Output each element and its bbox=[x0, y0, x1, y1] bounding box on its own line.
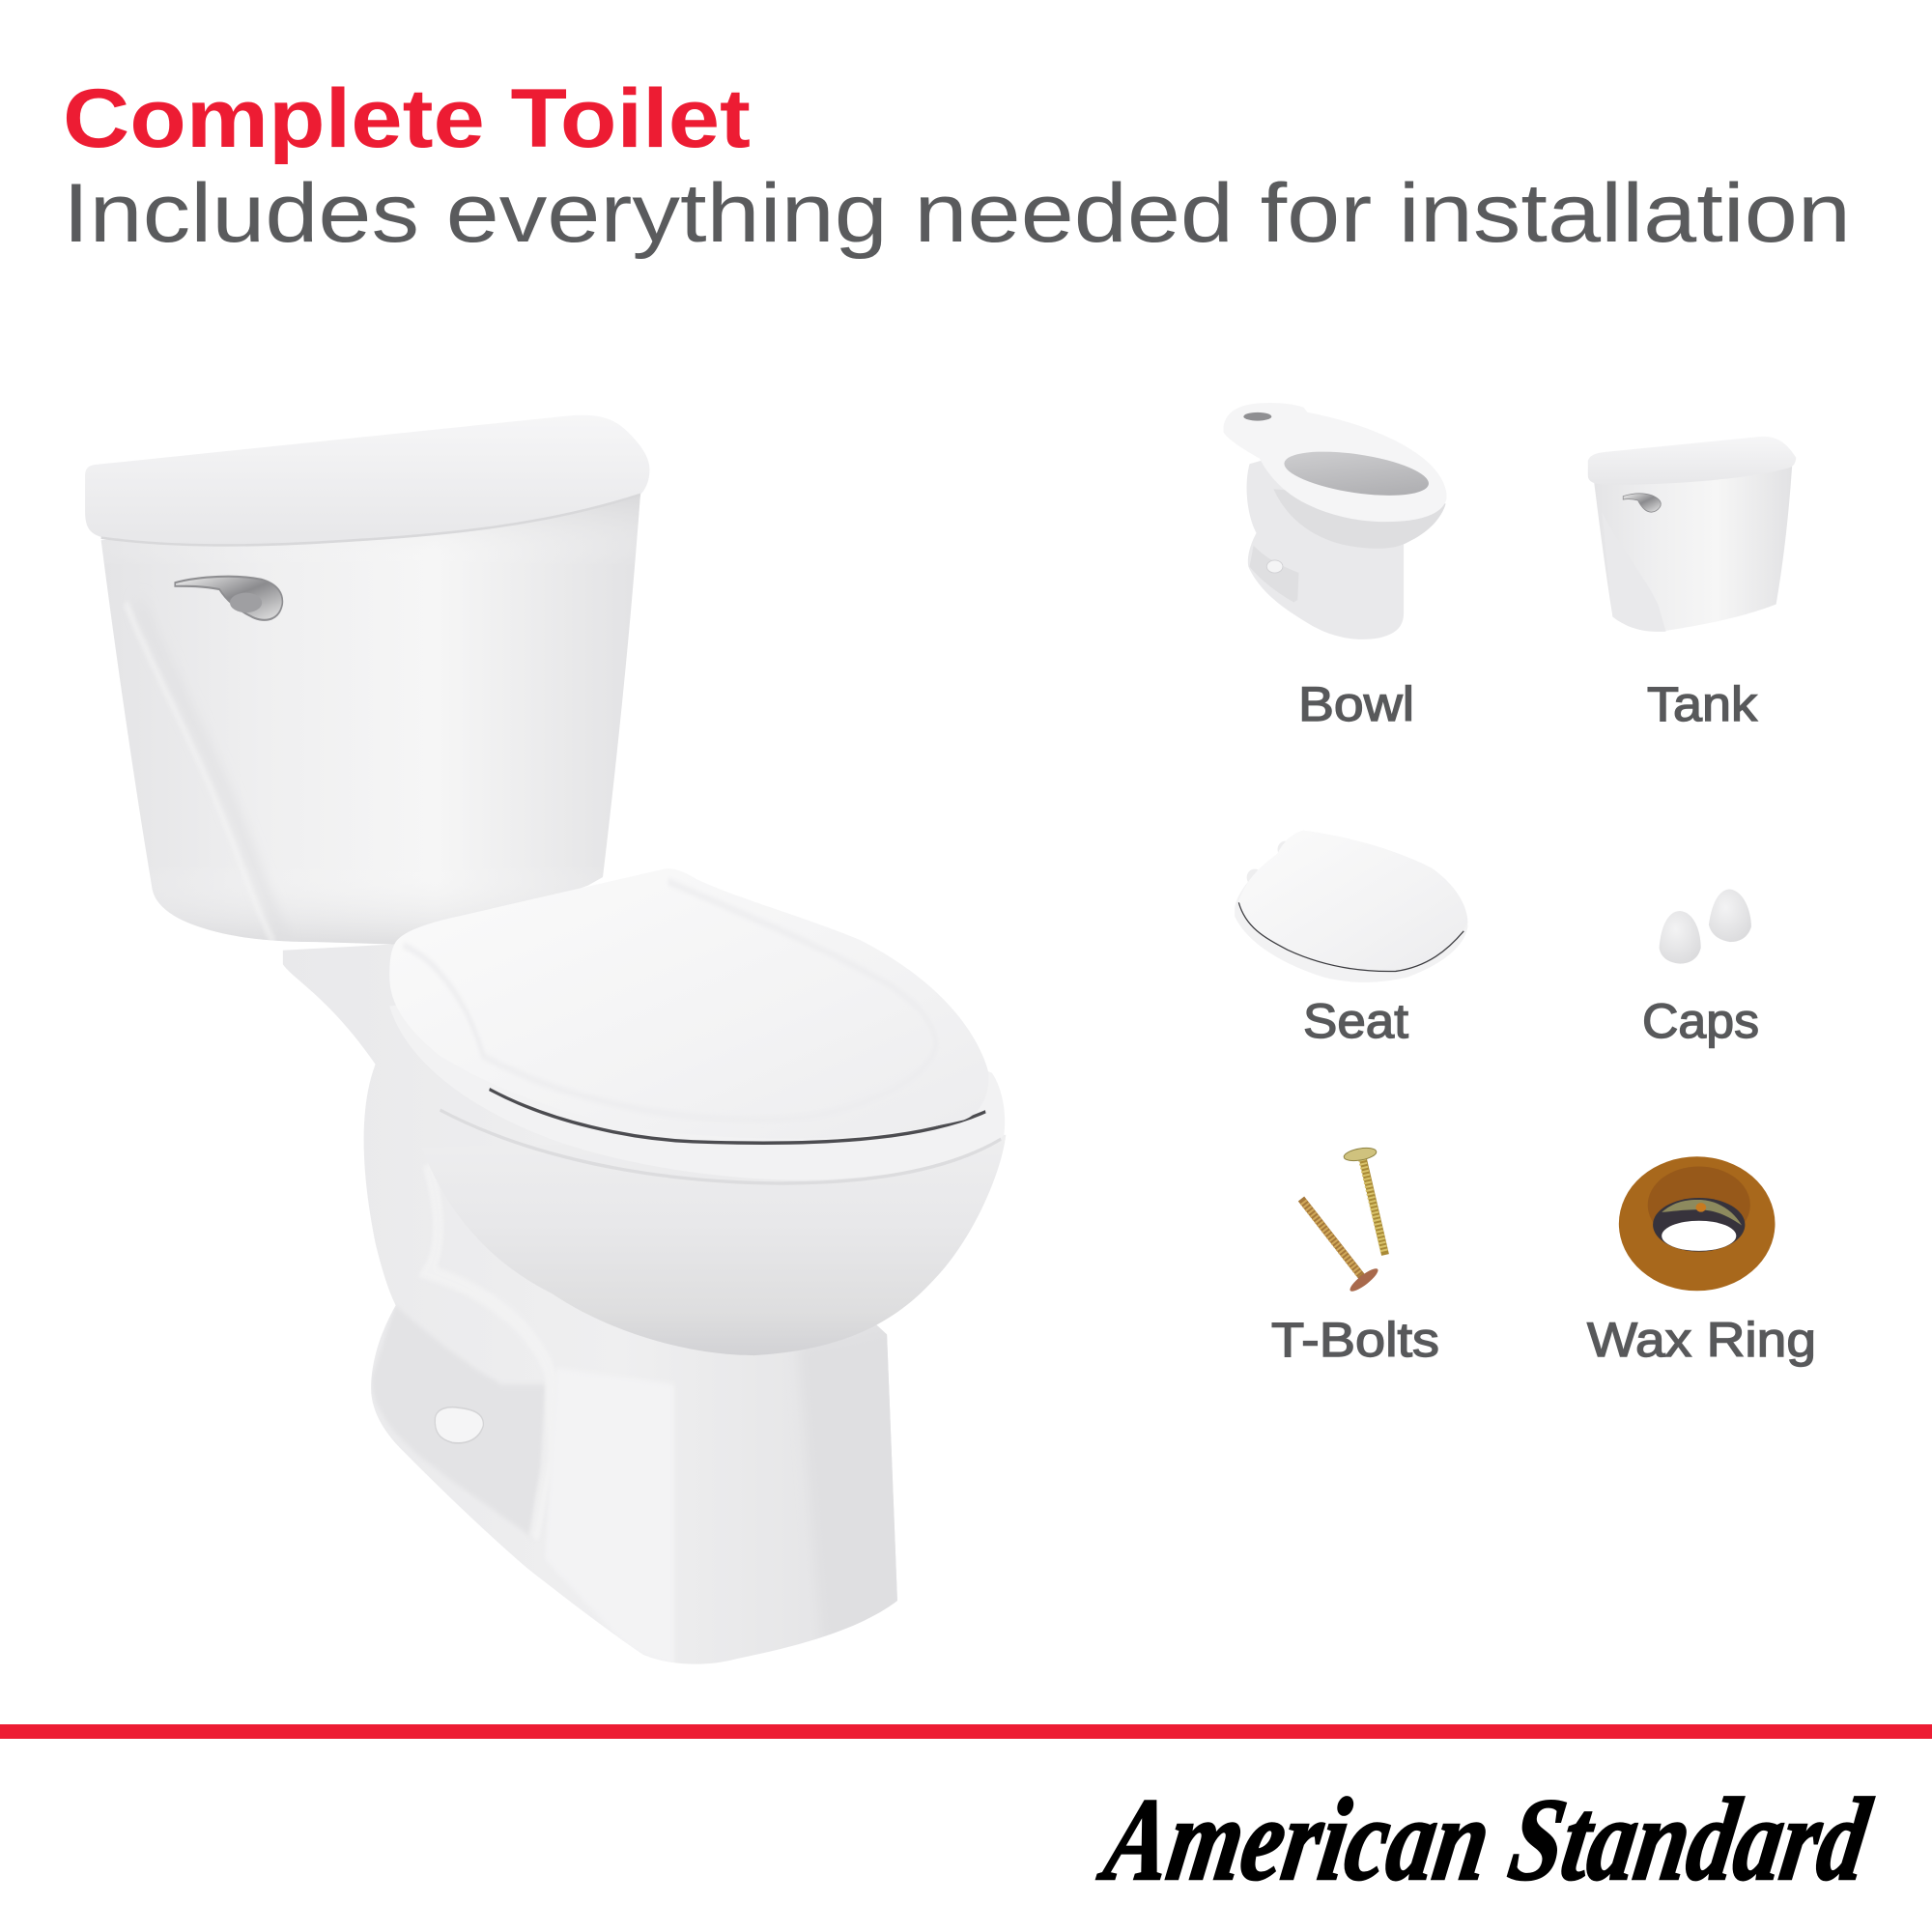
toilet bowl bbox=[421, 1135, 1006, 1355]
label: Seat: Seat bbox=[1303, 994, 1408, 1048]
part: seat bbox=[1235, 831, 1467, 982]
part: T-bolts bbox=[1301, 1146, 1385, 1294]
toilet seat lid bbox=[389, 868, 988, 1143]
label: Wax Ring: Wax Ring bbox=[1587, 1313, 1816, 1367]
label: Caps: Caps bbox=[1642, 994, 1759, 1048]
toilet tank bbox=[85, 415, 649, 946]
title: Complete Toilet: Complete Toilet bbox=[63, 72, 751, 165]
part: caps bbox=[1660, 889, 1751, 964]
bowl rim bbox=[389, 969, 1005, 1179]
label: T-Bolts: T-Bolts bbox=[1271, 1313, 1439, 1367]
bolt cap on base bbox=[435, 1407, 483, 1443]
footer red rule bbox=[0, 1724, 1932, 1739]
bolt one bbox=[1343, 1146, 1385, 1255]
part: wax ring bbox=[1619, 1156, 1776, 1291]
part: bowl bbox=[1224, 403, 1447, 639]
label: Tank: Tank bbox=[1647, 677, 1758, 731]
subtitle: Includes everything needed for installation bbox=[63, 167, 1851, 260]
part: tank bbox=[1588, 437, 1796, 632]
bolt two bbox=[1301, 1199, 1380, 1294]
flush handle bbox=[175, 577, 282, 620]
label: Bowl: Bowl bbox=[1298, 677, 1414, 731]
main toilet illustration bbox=[85, 415, 1006, 1667]
bowl base and trapway bbox=[283, 944, 902, 1667]
